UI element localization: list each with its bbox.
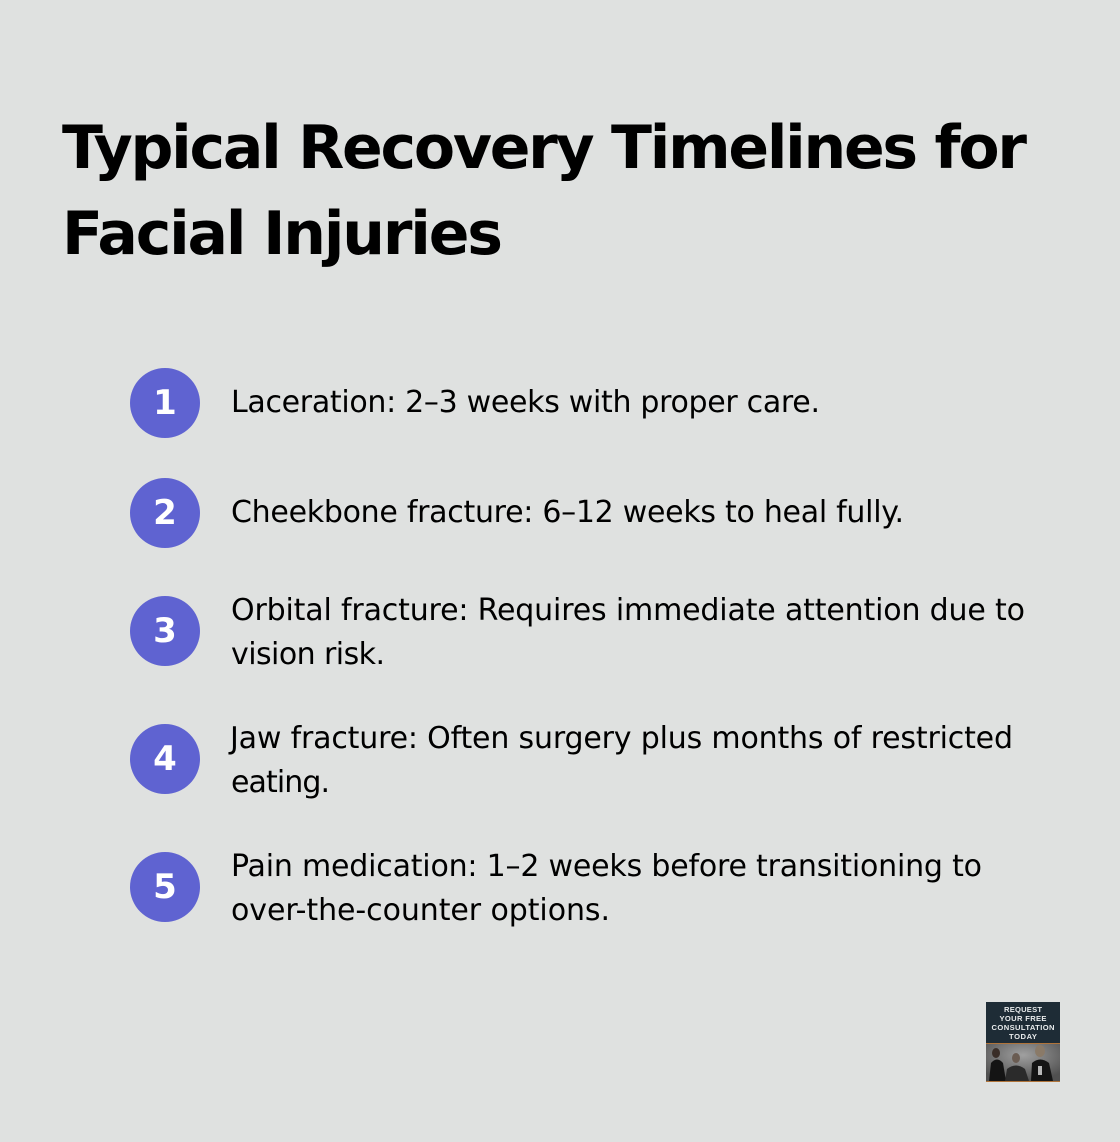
list item 3: vision risk. bbox=[231, 637, 385, 672]
list item 2: 2 bbox=[153, 493, 177, 533]
list item 2 bbox=[130, 478, 904, 548]
list item 4: 4 bbox=[153, 739, 177, 779]
list item 3 bbox=[130, 593, 1025, 672]
list item 3: 3 bbox=[153, 611, 177, 651]
consultation badge: REQUEST bbox=[1004, 1005, 1042, 1014]
list item 2: Cheekbone fracture: 6–12 weeks to heal fully. bbox=[231, 495, 904, 530]
list item 4: eating. bbox=[231, 765, 330, 800]
list item 1 bbox=[130, 368, 820, 438]
list item 1: 1 bbox=[153, 383, 177, 423]
list item 5: over-the-counter options. bbox=[231, 893, 610, 928]
title: Typical Recovery Timelines for bbox=[62, 113, 1027, 183]
list item 5: 5 bbox=[153, 867, 177, 907]
consultation badge bbox=[986, 1002, 1060, 1082]
list item 4 bbox=[130, 721, 1013, 800]
title bbox=[62, 113, 1027, 269]
list item 1: Laceration: 2–3 weeks with proper care. bbox=[231, 385, 820, 420]
consultation badge: YOUR FREE bbox=[1000, 1014, 1046, 1023]
list item 5 bbox=[130, 849, 982, 928]
list item 5: Pain medication: 1–2 weeks before transitioning to bbox=[231, 849, 982, 884]
title: Facial Injuries bbox=[62, 199, 503, 269]
list item 4: Jaw fracture: Often surgery plus months of restricted bbox=[228, 721, 1013, 756]
list item 3: Orbital fracture: Requires immediate attention due to bbox=[231, 593, 1025, 628]
consultation badge: CONSULTATION bbox=[992, 1023, 1054, 1032]
consultation badge: TODAY bbox=[1009, 1032, 1037, 1041]
people silhouettes bbox=[989, 1045, 1053, 1081]
